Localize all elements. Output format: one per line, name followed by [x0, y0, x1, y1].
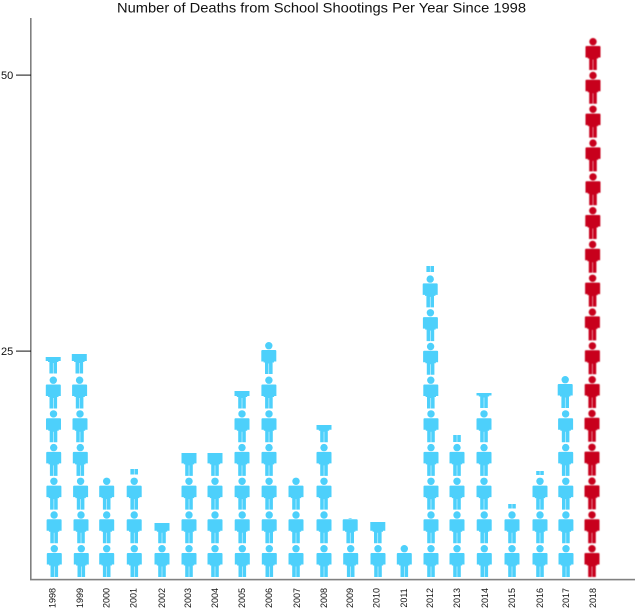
- year labels: 2018: [588, 588, 598, 608]
- year labels: 2009: [345, 588, 355, 608]
- year labels: 2015: [507, 588, 517, 608]
- column 2012: [423, 240, 438, 577]
- column 2008: [316, 410, 332, 577]
- year labels: [47, 588, 598, 608]
- year labels: 2011: [399, 588, 409, 608]
- column 2004: [208, 444, 222, 577]
- year labels: 2001: [129, 588, 139, 608]
- column 2005: [234, 376, 250, 577]
- y axis: 50: [1, 70, 13, 82]
- y axis: [1, 18, 32, 580]
- year labels: 2008: [319, 588, 329, 608]
- year labels: 2004: [210, 588, 220, 608]
- column 1999: [72, 342, 89, 577]
- year labels: 2000: [102, 588, 112, 608]
- column 2018 (red): [584, 38, 600, 577]
- column 2014: [476, 376, 492, 577]
- year labels: 2016: [535, 588, 545, 608]
- column 2009: [343, 511, 358, 577]
- x axis: [30, 579, 635, 580]
- year labels: 2017: [561, 588, 571, 608]
- column 2010: [370, 522, 386, 577]
- year labels: 2007: [292, 588, 302, 608]
- column 2016: [532, 471, 548, 577]
- pictogram columns: blue: [46, 240, 573, 577]
- column 2001: [126, 469, 142, 577]
- column 2007: [288, 478, 304, 577]
- year labels: 2003: [183, 588, 193, 608]
- year labels: 2014: [480, 588, 490, 608]
- column 2000: [99, 478, 114, 577]
- column 2006: [261, 342, 277, 577]
- column 2015: [504, 504, 520, 577]
- column 2017: [558, 376, 574, 577]
- y axis: 25: [1, 346, 13, 358]
- year labels: 1999: [75, 588, 85, 608]
- column 2002: [154, 523, 170, 577]
- year labels: 2005: [237, 588, 247, 608]
- year labels: 2002: [157, 588, 167, 608]
- year labels: 2012: [425, 588, 435, 608]
- year labels: 2013: [452, 588, 462, 608]
- column 2003: [182, 444, 196, 577]
- column 2011: [397, 545, 412, 577]
- year labels: 2006: [264, 588, 274, 608]
- year labels: 1998: [47, 588, 57, 608]
- column 1998: [46, 342, 62, 577]
- year labels: 2010: [372, 588, 382, 608]
- column 2013: [450, 435, 464, 577]
